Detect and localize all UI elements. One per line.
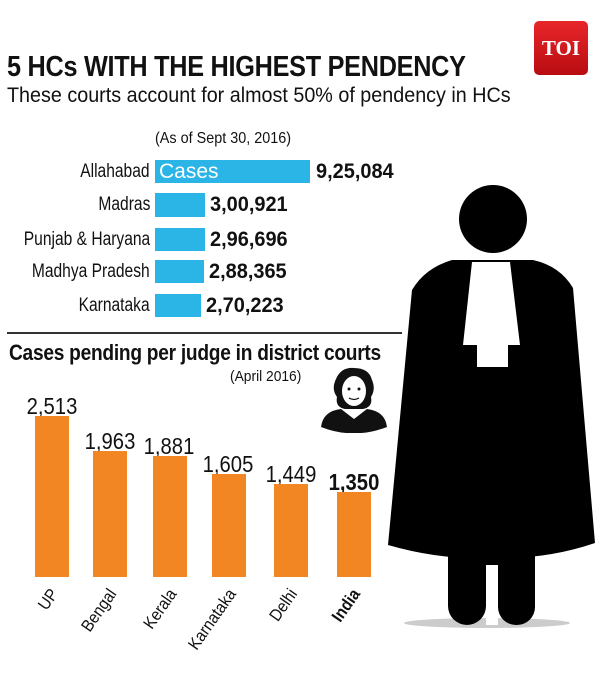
HC bar chart: 2,70,223 [206,294,284,317]
HC bar chart: Madras [98,194,150,215]
district bar chart [27,393,379,653]
icon: judge face [321,368,387,433]
HC bar chart [24,160,394,317]
HC bar chart: Madhya Pradesh [32,261,150,282]
HC bar chart: 2,88,365 [209,260,287,283]
district bar chart: 1,350 [329,469,379,495]
TOI logo: TOI [542,36,580,60]
district bar chart: UP [35,585,62,614]
district bar chart: 2,513 [27,393,77,419]
icon: judge in gown [388,185,595,628]
title: 5 HCs WITH THE HIGHEST PENDENCY [7,51,466,83]
district bar chart: Kerala [139,585,180,632]
HC bar chart: 2,96,696 [210,228,288,251]
district bar chart: India [328,585,364,625]
HC bar chart: Allahabad [81,161,150,182]
district bar chart: 1,963 [85,428,135,454]
date note: (As of Sept 30, 2016) [155,130,291,147]
district bar chart: Bengal [77,585,120,635]
district bar chart: 1,449 [266,461,316,487]
TOI logo [534,21,588,75]
HC bar chart: 3,00,921 [210,193,288,216]
district bar chart: Karnataka [184,585,239,653]
district bar chart: 1,605 [203,451,253,477]
HC bar chart: Karnataka [79,295,150,316]
section heading: Cases pending per judge in district courts [9,340,381,365]
district bar chart: Delhi [266,585,301,625]
district bar chart: 1,881 [144,433,194,459]
HC bar chart: 9,25,084 [316,160,394,183]
HC bar chart: Cases [159,160,219,183]
date note 2: (April 2016) [230,368,301,385]
subtitle: These courts account for almost 50% of pendency in HCs [7,84,511,107]
HC bar chart: Punjab & Haryana [24,229,150,250]
